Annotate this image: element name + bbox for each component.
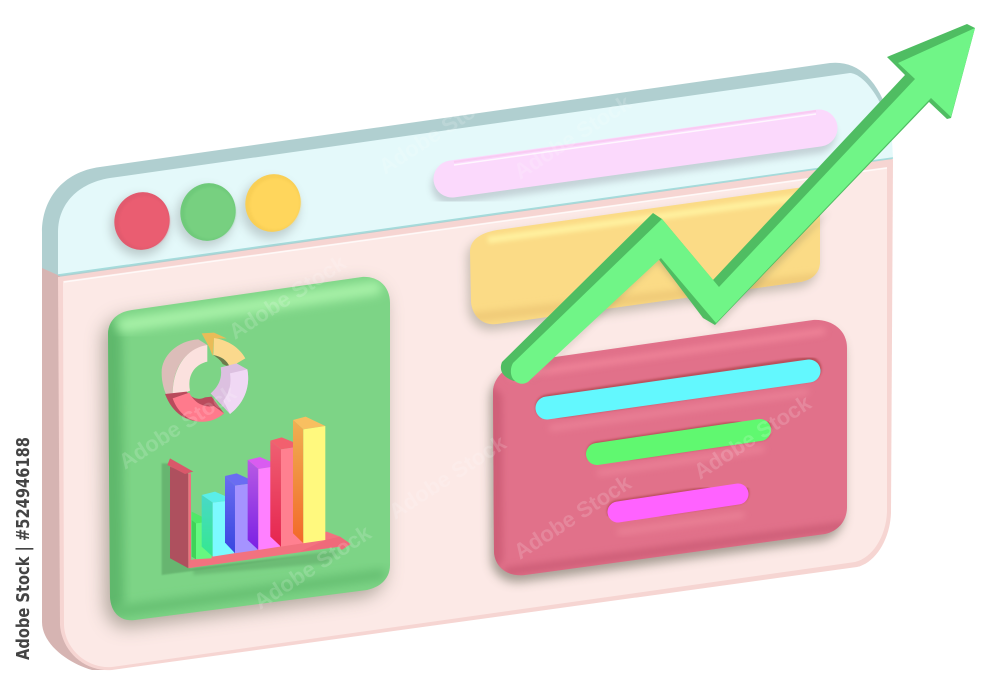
bar: magenta (248, 457, 280, 550)
window body (58, 159, 893, 670)
address bar (450, 111, 819, 186)
title bar (58, 73, 893, 275)
watermarks: Adobe Stock (509, 90, 636, 184)
frame left depth (42, 268, 110, 670)
watermarks: Adobe Stock (224, 250, 351, 344)
panel top bevel (125, 288, 375, 325)
magenta bar (618, 493, 742, 532)
axis arrowhead (300, 537, 351, 552)
donut: pale pink segment (162, 339, 207, 398)
bar chart (162, 417, 351, 575)
green chart panel (100, 270, 400, 630)
watermarks: Adobe Stock (384, 430, 511, 524)
watermarks: Adobe Stock (114, 380, 241, 474)
bar: cyan (202, 492, 234, 557)
frame top depth (42, 63, 892, 278)
arrow: growth trend (501, 24, 975, 384)
red bottom bevel (505, 526, 845, 572)
icon: yellow button (237, 166, 309, 240)
stock credit: Adobe Stock | #524946188 (13, 437, 34, 660)
watermarks: Adobe Stock (689, 390, 816, 484)
window control buttons (106, 166, 309, 258)
pie chart (162, 333, 248, 422)
panel left bevel (108, 317, 127, 614)
cyan bar (547, 369, 809, 428)
panel bottom bevel (115, 574, 385, 612)
arrow shadow (530, 212, 830, 384)
donut: yellow segment (202, 333, 245, 367)
red top highlight (510, 331, 825, 376)
donut: red segment (165, 392, 224, 422)
watermarks (114, 85, 816, 614)
red left bevel (493, 386, 504, 566)
arrow front face (511, 28, 975, 384)
donut: lilac segment (211, 363, 248, 414)
window frame (42, 63, 893, 670)
bar: green (192, 512, 212, 559)
arrow dark side (501, 24, 975, 381)
green bar (597, 429, 762, 473)
yellow card (465, 180, 825, 330)
bar: red (270, 437, 303, 547)
yellow top highlight (488, 196, 810, 240)
red card (485, 315, 855, 582)
watermarks: Adobe Stock (509, 470, 636, 564)
watermarks: Adobe Stock (249, 520, 376, 614)
bar: yellow (293, 417, 325, 543)
axes (167, 458, 351, 568)
bar: blue (225, 473, 257, 553)
icon: green button (172, 175, 244, 249)
icon: red button (106, 184, 178, 258)
watermarks: Adobe Stock (374, 85, 501, 179)
